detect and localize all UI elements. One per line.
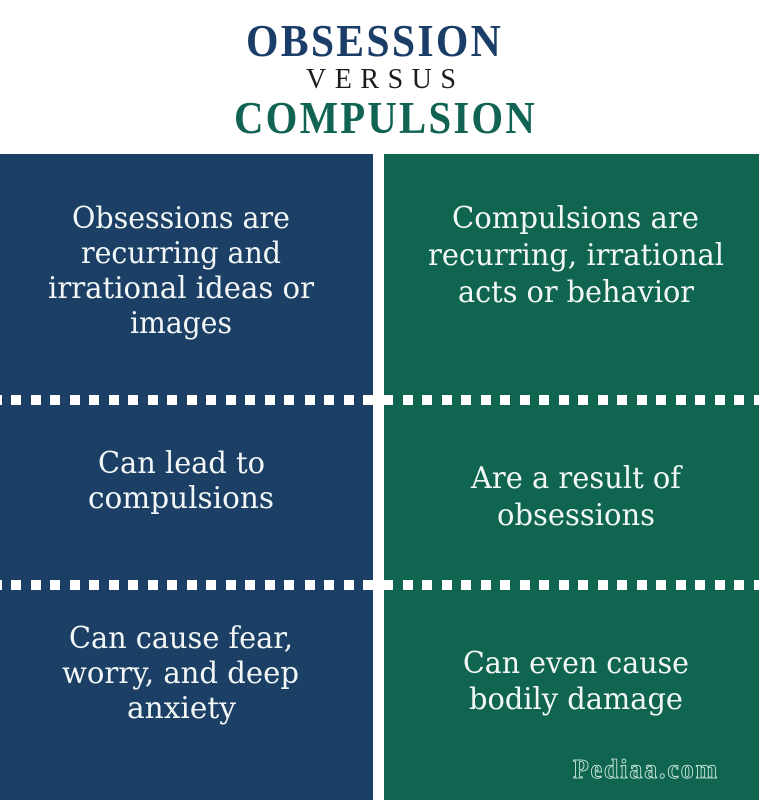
text: compulsion relation: obsessions	[497, 498, 655, 533]
title	[234, 15, 537, 143]
text: obsession effects: Can cause fear,	[69, 621, 293, 656]
text: obsession definition: irrational ideas or	[48, 271, 315, 306]
dotted divider: upper	[0, 395, 759, 405]
text: obsession relation	[88, 446, 274, 516]
text: compulsion effects	[463, 646, 689, 717]
text: compulsion effects: Can even cause	[463, 646, 689, 681]
heading: versus: VERSUS	[306, 64, 456, 95]
text: obsession relation: Can lead to	[98, 446, 265, 481]
dotted divider: lower	[0, 580, 759, 590]
text: obsession effects: worry, and deep	[62, 656, 299, 691]
text: compulsion effects: bodily damage	[469, 682, 683, 717]
text: compulsion relation	[470, 461, 683, 533]
panel: compulsion column	[384, 154, 759, 800]
text: compulsion definition	[428, 201, 724, 310]
heading: obsession: OBSESSION	[246, 15, 503, 66]
text: compulsion definition: acts or behavior	[458, 275, 695, 310]
text: compulsion relation: Are a result of	[470, 461, 683, 496]
logo: Pediaa.com: Pediaa.com	[573, 754, 719, 784]
text: obsession definition: Obsessions are	[72, 201, 290, 236]
text: obsession relation: compulsions	[88, 481, 274, 516]
text: obsession effects: anxiety	[127, 691, 236, 726]
text: compulsion definition: Compulsions are	[452, 201, 699, 236]
text: compulsion definition: recurring, irrational	[428, 238, 724, 273]
panel: obsession column	[0, 154, 373, 800]
text: obsession effects	[62, 621, 299, 726]
text: obsession definition: recurring and	[81, 236, 281, 271]
heading: compulsion: COMPULSION	[234, 92, 537, 143]
text: obsession definition: images	[130, 306, 232, 341]
text: obsession definition	[48, 201, 315, 341]
